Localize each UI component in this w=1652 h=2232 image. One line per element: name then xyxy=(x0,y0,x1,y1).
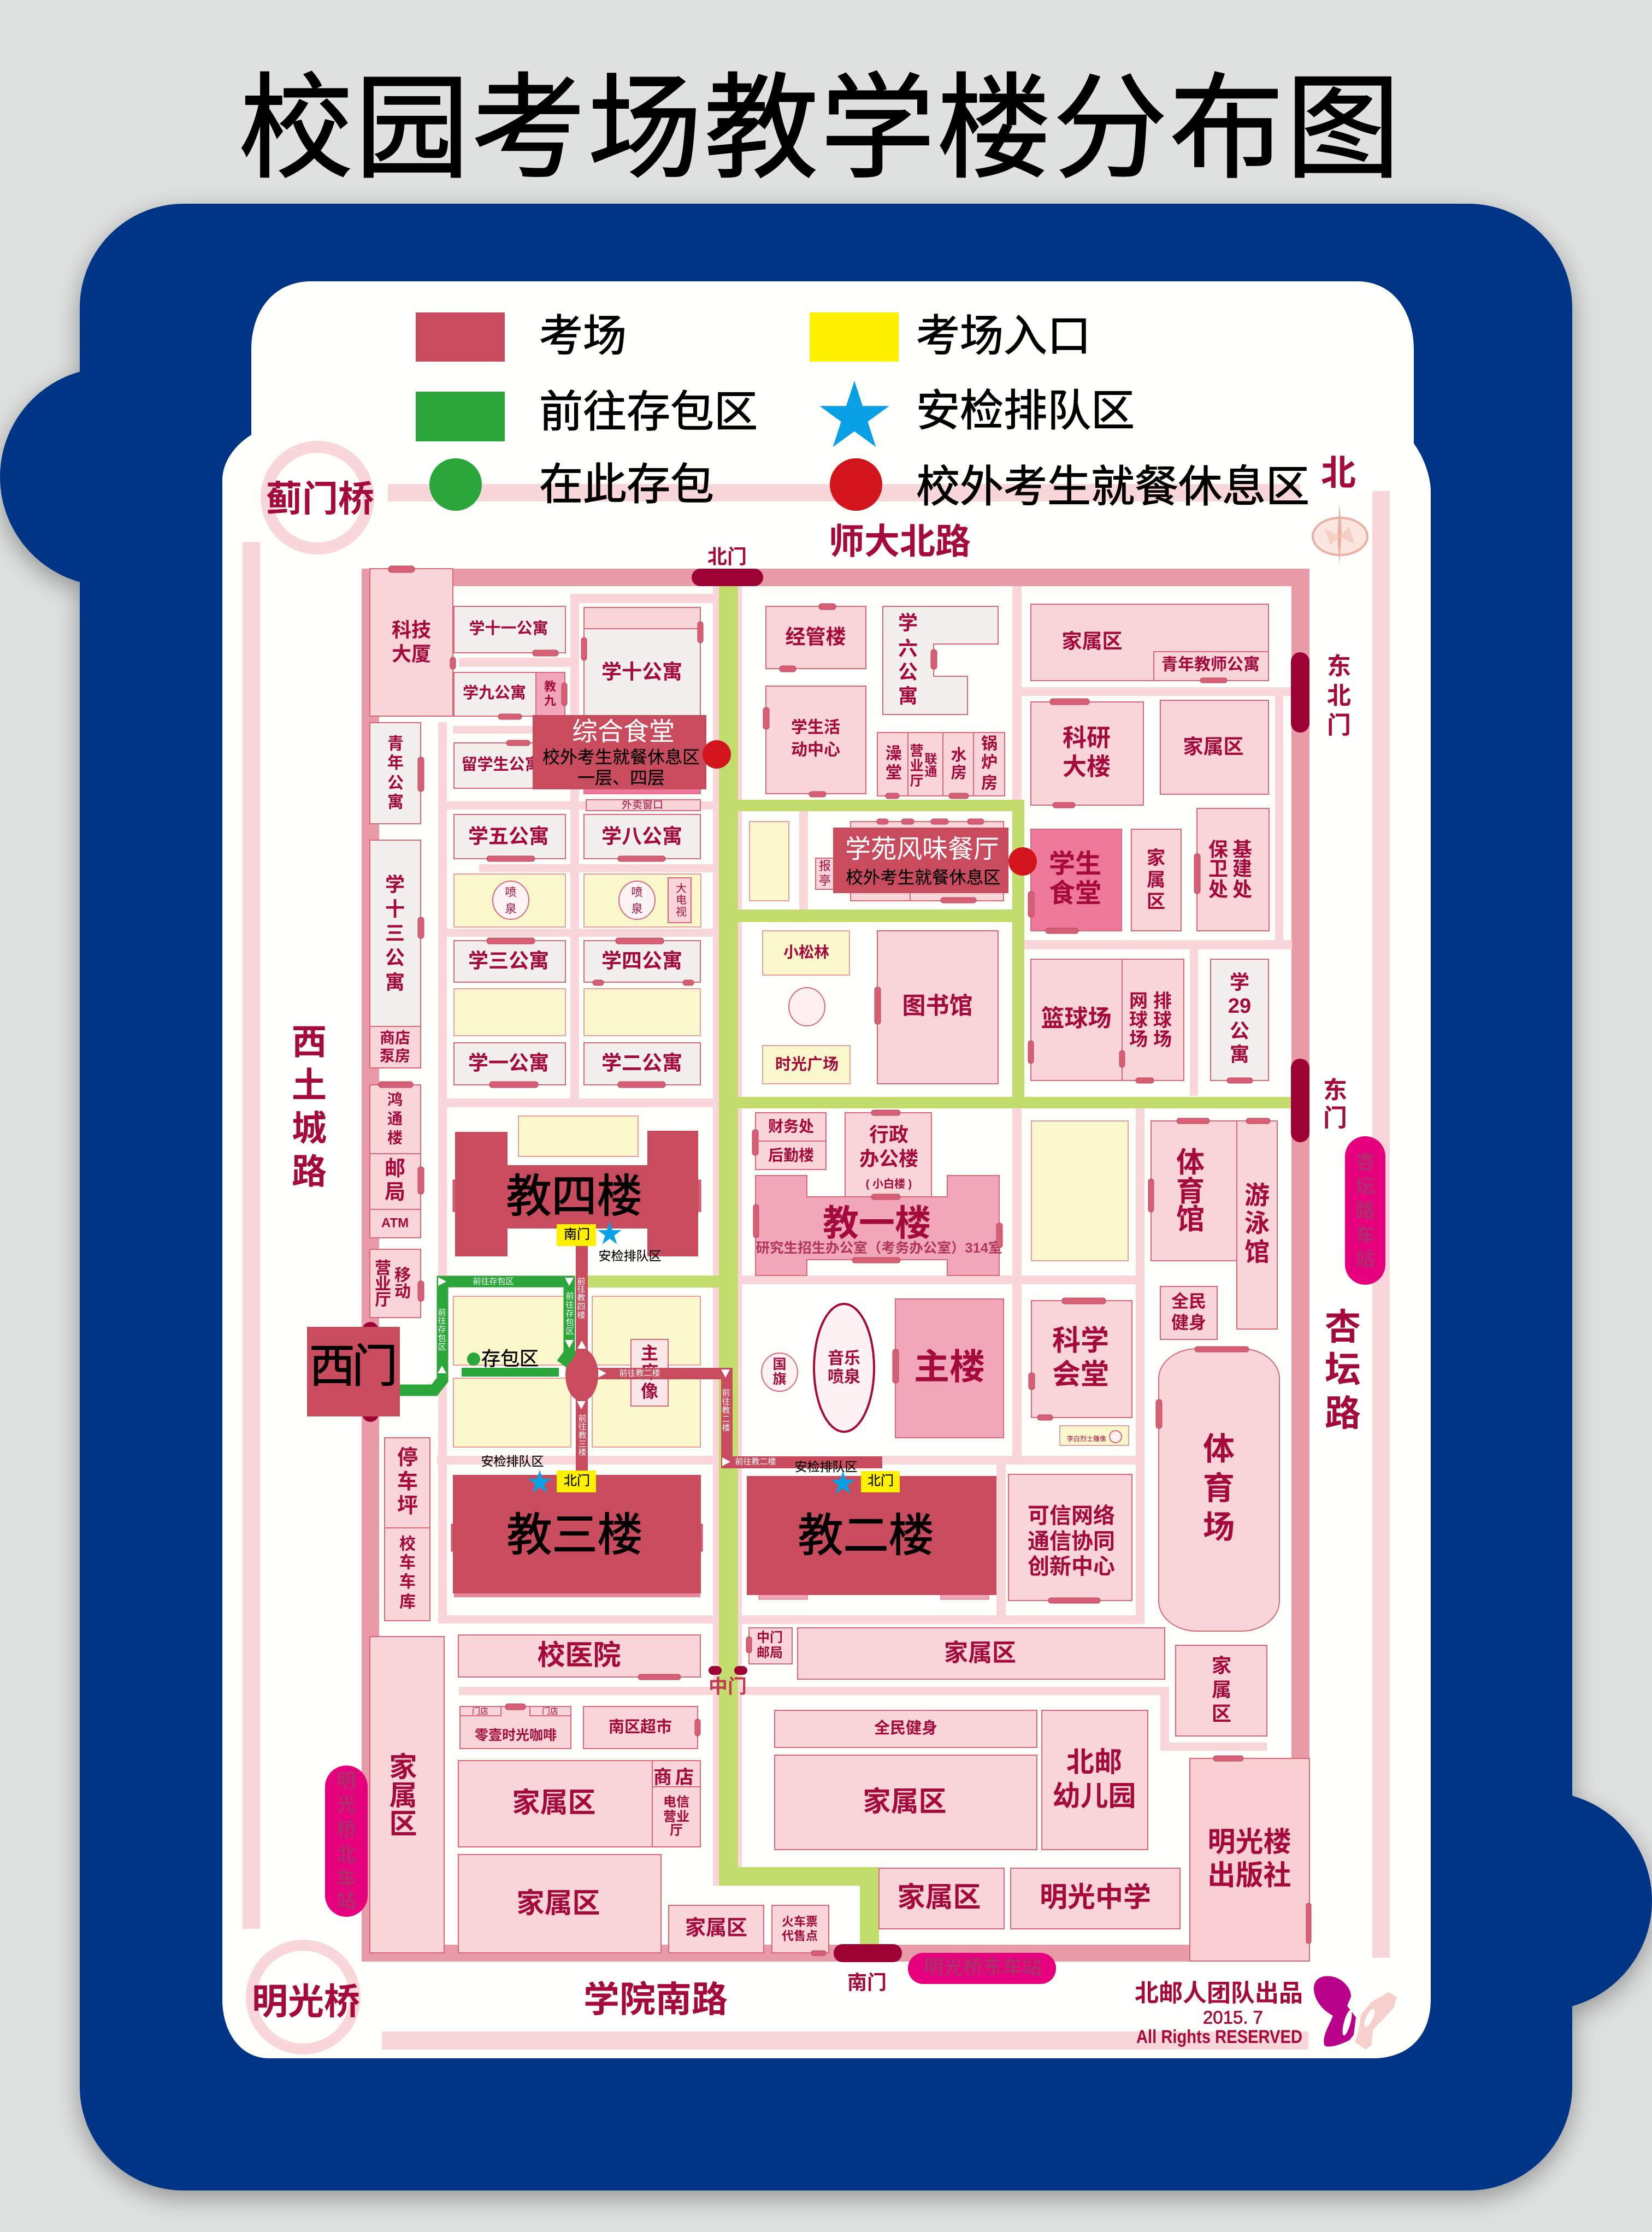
building: housing southeast vertical: 家属区 xyxy=(1212,1654,1231,1725)
compass xyxy=(1313,503,1367,564)
exam hall: teaching building 3: 教三楼 xyxy=(507,1510,642,1560)
lawn north of east sports xyxy=(1031,1121,1128,1261)
building: dorm 8 xyxy=(584,814,700,859)
gate: south xyxy=(834,1944,902,1962)
gate label: northeast: 东北门 xyxy=(1327,653,1351,739)
building: admin office: 办公楼 xyxy=(859,1147,918,1170)
building: kindergarten: 北邮 xyxy=(1066,1747,1122,1778)
entrance: south door of building 4 xyxy=(557,1224,596,1246)
building: dorm 9 xyxy=(454,672,536,716)
building: dorm 9: 学九公寓 xyxy=(463,684,526,702)
building: gymnasium: 体育馆 xyxy=(1176,1147,1205,1236)
building: zhongmen post office: 中门 xyxy=(757,1630,783,1645)
building: dorm 2 xyxy=(584,1043,700,1085)
credits: 北邮人团队出品 xyxy=(1135,1980,1303,2007)
gate: middle xyxy=(709,1666,747,1675)
building: kindergarten: 幼儿园 xyxy=(1052,1781,1136,1811)
building: teaching building 1: 教一楼 xyxy=(823,1203,931,1243)
building: dorm 13 xyxy=(370,840,421,1026)
entrance: north door of building 2 xyxy=(861,1471,900,1492)
building: finance office xyxy=(756,1113,826,1141)
road labels and gates xyxy=(252,453,1361,2022)
gate: north xyxy=(692,569,763,586)
gate label: north: 北门 xyxy=(707,545,747,568)
building: dorm 1 xyxy=(454,1043,565,1085)
building: dorm 10 xyxy=(584,607,700,794)
building: train ticket office xyxy=(772,1905,829,1953)
lawn: small pine wood: 小松林 xyxy=(783,944,829,960)
canteen callout: Xueyuan restaurant xyxy=(833,828,1008,893)
campus inner lanes xyxy=(437,586,1292,1886)
building: public fitness: 全民 xyxy=(1171,1291,1206,1311)
legend swatch: entrance xyxy=(810,312,899,362)
flag pole xyxy=(762,1353,798,1391)
building: teaching building 1: 研究生招生办公室（考务办公室）314室 xyxy=(756,1240,1002,1256)
building: innovation centre xyxy=(1008,1474,1132,1601)
building: housing with shops xyxy=(458,1761,700,1847)
building: hospital: 校医院 xyxy=(537,1640,621,1670)
route labels: 前往存包区 xyxy=(438,1308,446,1351)
route labels: 前往教四楼 xyxy=(577,1277,586,1320)
north marker: 北 xyxy=(1321,453,1356,493)
legend label: security queue: 安检排队区 xyxy=(916,387,1135,435)
building row: bath, telecom, water, boiler xyxy=(877,733,1005,796)
building: student canteen: 食堂 xyxy=(1049,879,1101,908)
star: queue at building 3 xyxy=(528,1470,552,1493)
building: housing vertical xyxy=(1131,829,1181,931)
building: economics and management: 经管楼 xyxy=(786,626,846,648)
canteen callout: comprehensive dining hall: 综合食堂 xyxy=(572,717,675,746)
legend label: rest area: 校外考生就餐休息区 xyxy=(916,462,1309,511)
building: zhongmen post office xyxy=(749,1628,792,1664)
building: housing south centre: 家属区 xyxy=(863,1786,947,1817)
legend label: exam hall: 考场 xyxy=(539,311,627,361)
entrance: north door of building 3: 北门 xyxy=(564,1474,590,1488)
building: mobile hall xyxy=(370,1249,421,1318)
building: dorm 3: 学三公寓 xyxy=(468,949,549,972)
building: science tower xyxy=(370,569,453,716)
building: housing wide xyxy=(798,1628,1165,1679)
label: queue at building 4: 安检排队区 xyxy=(599,1249,661,1263)
building: logistics: 后勤楼 xyxy=(768,1147,814,1164)
butterfly logo xyxy=(1314,1976,1397,2050)
building: teaching 9 xyxy=(536,672,565,716)
building entrances xyxy=(379,566,1311,1956)
building: coffee shop: 门店 xyxy=(542,1707,558,1716)
building: logistics xyxy=(756,1141,826,1170)
building: housing with shops: 家属区 xyxy=(512,1787,596,1818)
lawn with fountain west xyxy=(454,874,565,927)
building: library xyxy=(877,931,998,1084)
building: bus garage: 校车车库 xyxy=(399,1535,416,1611)
road label: east: 杏坛路 xyxy=(1325,1307,1361,1433)
building: ATM xyxy=(370,1209,421,1238)
music fountain xyxy=(814,1304,874,1432)
building: faculty housing: 青年教师公寓 xyxy=(1161,656,1260,674)
legend label: bag storage here: 在此存包 xyxy=(539,460,714,509)
west gate block xyxy=(307,1327,400,1416)
route labels: 前往教二楼 xyxy=(619,1369,660,1378)
building: ATM: ATM xyxy=(381,1216,409,1230)
building: science hall: 科学 xyxy=(1052,1325,1109,1357)
music fountain: 喷泉 xyxy=(828,1368,860,1386)
building: coffee shop: 门店 xyxy=(472,1707,488,1716)
lawns around the statue xyxy=(453,1116,700,1447)
building: housing with shops: 厅 xyxy=(670,1823,683,1838)
building row: bath, telecom, water, boiler: 澡堂 xyxy=(886,745,902,782)
route direction arrows xyxy=(438,1277,730,1466)
building: newsstand: 报亭 xyxy=(819,859,831,887)
label: takeaway window xyxy=(586,799,700,811)
building: gymnasium xyxy=(1151,1121,1237,1261)
building: coffee shop xyxy=(460,1707,571,1749)
building: mobile hall: 营业厅 xyxy=(375,1260,391,1309)
bridge ring: Mingguang xyxy=(251,1945,355,2049)
building: youth apartment: 青年公寓 xyxy=(387,735,404,812)
credits: All Rights RESERVED xyxy=(1136,2027,1302,2047)
building: housing small xyxy=(669,1905,764,1953)
building: dorm 29: 公 xyxy=(1230,1019,1249,1042)
lawn with fountain west: 喷泉 xyxy=(505,886,517,916)
lawn with fountain east xyxy=(584,874,701,927)
legend icon: bag storage dot xyxy=(429,458,482,511)
statue plaque xyxy=(1060,1426,1129,1445)
exam hall: teaching building 2: 教二楼 xyxy=(798,1510,934,1561)
canteen callout: comprehensive dining hall: 校外考生就餐休息区 xyxy=(542,747,700,767)
label: queue at building 3: 安检排队区 xyxy=(481,1454,544,1468)
building: hospital xyxy=(458,1635,700,1677)
bus stop: Mingguang east xyxy=(908,1953,1056,1984)
lawn with fountain east: 大电视 xyxy=(676,882,687,918)
building: train ticket office: 代售点 xyxy=(782,1929,818,1942)
building: post office xyxy=(370,1154,421,1209)
building: mobile hall: 移动 xyxy=(394,1266,411,1301)
building: international dorm: 留学生公寓 xyxy=(461,755,541,773)
route labels xyxy=(438,1277,776,1466)
building: science hall xyxy=(1031,1301,1132,1418)
building: public fitness south: 全民健身 xyxy=(874,1719,937,1737)
building: Mingguang press: 出版社 xyxy=(1207,1859,1291,1891)
road label: north: 师大北路 xyxy=(829,521,971,562)
bridge label: Jimen: 蓟门桥 xyxy=(266,479,374,519)
building: housing southwest: 家属区 xyxy=(516,1888,600,1918)
building: tennis and volleyball courts: 网球场 xyxy=(1129,991,1148,1050)
bridge label: Mingguang: 明光桥 xyxy=(252,1981,360,2022)
flag pole: 国旗 xyxy=(772,1357,787,1387)
building: swimming pool: 游泳馆 xyxy=(1244,1181,1270,1266)
building: parking lot xyxy=(385,1438,430,1528)
building: student canteen xyxy=(1031,829,1122,931)
route labels: 前往教二楼 xyxy=(722,1389,730,1432)
green walkway routes xyxy=(587,586,1297,1946)
music fountain: 音乐 xyxy=(828,1349,860,1368)
building: science hall: 会堂 xyxy=(1052,1359,1109,1391)
building: security and construction offices: 基建处 xyxy=(1232,838,1252,900)
building: housing vertical: 家属区 xyxy=(1147,848,1165,912)
title: 校园考场教学楼分布图 xyxy=(239,66,1402,192)
bus stop: Mingguang north: 明光桥北车站 xyxy=(337,1770,356,1912)
building: research tower: 科研 xyxy=(1063,724,1111,752)
building: dorm 11 xyxy=(454,606,565,653)
building: dorm 1: 学一公寓 xyxy=(468,1052,549,1074)
building: housing west tall: 家属区 xyxy=(389,1751,417,1840)
gate label: east: 东门 xyxy=(1323,1077,1347,1132)
entrance: south door of building 4: 南门 xyxy=(564,1227,590,1242)
building: zhongmen post office: 邮局 xyxy=(757,1645,783,1661)
building: housing with shops: 电信 xyxy=(663,1795,689,1809)
building row: bath, telecom, water, boiler: 营业厅 xyxy=(910,743,924,789)
road label: west: 西土城路 xyxy=(292,1023,327,1191)
bus stop: Xingtan: 杏坛路车站 xyxy=(1355,1150,1375,1271)
building: admin office: ( 小白楼 ) xyxy=(866,1178,912,1190)
building: public fitness: 健身 xyxy=(1171,1313,1206,1332)
credits: 2015. 7 xyxy=(1203,2007,1263,2028)
building: international dorm xyxy=(454,743,565,788)
building: housing southeast vertical xyxy=(1176,1645,1267,1736)
building: innovation centre: 可信网络 xyxy=(1028,1504,1115,1528)
lawn: time square xyxy=(763,1046,850,1084)
white map panel xyxy=(222,281,1431,2058)
route labels: 前往教二楼 xyxy=(735,1457,776,1466)
entrance: north door of building 2: 北门 xyxy=(868,1474,894,1488)
building: student canteen: 学生 xyxy=(1049,850,1101,878)
round plaza xyxy=(789,988,825,1026)
lawn near Xueyuan xyxy=(750,822,789,901)
building: Hongtong xyxy=(370,1085,421,1154)
building: main building: 主楼 xyxy=(914,1347,985,1386)
building: dorm 8: 学八公寓 xyxy=(601,825,682,848)
lawn with fountain east: 喷泉 xyxy=(632,886,642,916)
building: dorm 5: 学五公寓 xyxy=(468,825,549,848)
building row: bath, telecom, water, boiler: 水房 xyxy=(951,746,967,782)
building: Mingguang press: 明光楼 xyxy=(1207,1827,1291,1857)
exam hall: teaching building 4 xyxy=(453,1131,701,1256)
exam hall: teaching building 4: 教四楼 xyxy=(506,1171,642,1221)
building: science tower: 科技 xyxy=(392,618,431,641)
building: housing with shops: 商店 xyxy=(653,1767,697,1788)
entrance: north door of building 3 xyxy=(557,1471,596,1492)
rest area dot: dining hall xyxy=(703,740,731,769)
building: stadium: 体育场 xyxy=(1203,1431,1235,1545)
route labels: 前往教三楼 xyxy=(578,1414,587,1457)
building: security and construction offices xyxy=(1197,808,1269,931)
building: Mingguang press xyxy=(1190,1758,1309,1961)
lawns between dorms xyxy=(454,989,700,1036)
rest area dot: Xueyuan restaurant xyxy=(1008,847,1037,876)
route: to exam buildings xyxy=(565,1246,882,1472)
building row: bath, telecom, water, boiler: 锅炉房 xyxy=(981,735,998,792)
building: newsstand xyxy=(816,858,837,889)
building: housing: 家属区 xyxy=(1183,735,1243,758)
building: dorm 4 xyxy=(584,941,700,982)
building: public fitness south xyxy=(775,1710,1037,1747)
statue plaque: 李白烈士雕像 xyxy=(1067,1434,1106,1443)
campus perimeter road xyxy=(362,569,1309,1962)
building: Mingguang middle school: 明光中学 xyxy=(1040,1881,1151,1913)
building: tennis and volleyball courts: 排球场 xyxy=(1153,991,1172,1050)
building: shops and pump room xyxy=(370,1026,421,1068)
statue of chairman: 主席像 xyxy=(641,1343,658,1401)
building: dorm 6 xyxy=(883,606,998,715)
building: dorm 3 xyxy=(454,941,565,982)
building: housing west tall xyxy=(370,1637,444,1953)
building: Mingguang middle school xyxy=(1011,1868,1180,1929)
building: housing southwest xyxy=(458,1855,661,1953)
building: faculty housing: 家属区 xyxy=(1062,630,1122,652)
building: dorm 13: 学十三公寓 xyxy=(385,873,405,993)
building: public fitness xyxy=(1160,1286,1217,1339)
route labels: 前往存包区 xyxy=(565,1291,574,1336)
building: Hongtong: 鸿通楼 xyxy=(387,1091,403,1146)
canteen callout: Xueyuan restaurant: 校外考生就餐休息区 xyxy=(846,867,1001,887)
building: dorm 29: 学 xyxy=(1230,971,1249,993)
gate: east xyxy=(1291,1059,1309,1142)
building: post office: 邮局 xyxy=(385,1158,405,1204)
building: shops and pump room: 商店 xyxy=(380,1029,410,1047)
building: dorm 6: 学六公寓 xyxy=(898,612,918,707)
gate: west pills xyxy=(362,1322,379,1422)
building: dorm 4: 学四公寓 xyxy=(601,949,682,972)
building: supermarket: 南区超市 xyxy=(609,1718,672,1736)
bus stop: Mingguang east: 明光桥东车站 xyxy=(924,1956,1042,1979)
bus stop: Xingtan xyxy=(1345,1136,1385,1285)
building: student activity centre: 动中心 xyxy=(791,741,840,759)
middle gate label: 中门 xyxy=(709,1676,747,1698)
building: housing by south gate xyxy=(879,1868,1004,1929)
building: housing with shops: 营业 xyxy=(663,1809,689,1824)
building: kindergarten xyxy=(1042,1710,1148,1850)
canteen callout: comprehensive dining hall: 一层、四层 xyxy=(577,768,665,788)
building: basketball court: 篮球场 xyxy=(1041,1006,1111,1032)
building: faculty housing xyxy=(1031,604,1268,681)
building: teaching building 1 xyxy=(756,1176,1002,1276)
building: economics and management xyxy=(766,606,866,669)
building: housing by south gate: 家属区 xyxy=(897,1881,981,1913)
building: innovation centre: 通信协同 xyxy=(1028,1530,1115,1554)
exam hall: teaching building 3 xyxy=(451,1475,703,1597)
credits xyxy=(1135,1980,1303,2047)
building: supermarket xyxy=(583,1707,698,1749)
building: dorm 2: 学二公寓 xyxy=(601,1052,682,1074)
building: dorm 29: 29 xyxy=(1228,995,1251,1018)
building: research tower xyxy=(1031,702,1143,805)
route: to bag storage xyxy=(400,1282,569,1390)
outer city roads xyxy=(243,484,1390,2050)
bus stop: Mingguang north xyxy=(325,1765,368,1917)
building: coffee shop: 零壹时光咖啡 xyxy=(475,1728,557,1743)
building: Xueyuan base xyxy=(851,822,1004,901)
canteen callout: Xueyuan restaurant: 学苑风味餐厅 xyxy=(845,835,999,863)
canteen callout: comprehensive dining hall xyxy=(533,715,706,789)
building: dorm 11: 学十一公寓 xyxy=(469,619,548,637)
lawn: time square: 时光广场 xyxy=(775,1055,839,1073)
building: research tower: 大楼 xyxy=(1063,754,1111,780)
exam hall: teaching building 2 xyxy=(747,1476,996,1599)
star: queue at building 2 xyxy=(831,1471,855,1494)
building: student activity centre xyxy=(766,686,866,794)
building: dorm 5 xyxy=(454,814,565,859)
lawn: small pine wood xyxy=(763,931,849,975)
legend swatch: exam hall xyxy=(416,312,505,362)
building: tennis and volleyball courts xyxy=(1122,959,1184,1080)
route labels: 前往存包区 xyxy=(473,1277,514,1286)
legend icon: security queue star xyxy=(819,381,889,447)
legend xyxy=(416,311,1309,511)
legend label: to bag storage: 前往存包区 xyxy=(539,388,758,436)
bridge ring: Jimen xyxy=(267,447,368,548)
building: finance office: 财务处 xyxy=(768,1118,814,1135)
building: innovation centre: 创新中心 xyxy=(1028,1555,1115,1579)
label: takeaway window: 外卖窗口 xyxy=(622,799,663,811)
building: student activity centre: 学生活 xyxy=(791,719,840,736)
legend icon: rest area dot xyxy=(830,458,882,511)
building: housing xyxy=(1160,700,1268,794)
building: science tower: 大厦 xyxy=(392,642,431,665)
building: housing small: 家属区 xyxy=(685,1917,747,1940)
building: stadium xyxy=(1159,1349,1279,1631)
building: youth apartment xyxy=(370,723,421,824)
building: admin office: 行政 xyxy=(869,1123,908,1146)
building: swimming pool xyxy=(1237,1121,1277,1329)
building: housing wide: 家属区 xyxy=(944,1640,1016,1666)
building: train ticket office: 火车票 xyxy=(782,1915,818,1928)
building: shops and pump room: 泵房 xyxy=(380,1048,410,1064)
building: dorm 29: 寓 xyxy=(1230,1043,1249,1065)
building: main building xyxy=(895,1299,1004,1438)
star: queue at building 4 xyxy=(598,1221,622,1244)
building: admin office xyxy=(845,1113,931,1197)
building: housing south centre xyxy=(775,1755,1037,1850)
gate label: south: 南门 xyxy=(847,1971,887,1994)
label: queue at building 2: 安检排队区 xyxy=(794,1460,858,1474)
legend swatch: to bag storage xyxy=(416,392,505,441)
building: library: 图书馆 xyxy=(902,993,972,1019)
building: teaching 9: 教九 xyxy=(544,680,556,708)
building: parking lot: 停车坪 xyxy=(397,1446,418,1517)
building: dorm 29 xyxy=(1211,959,1268,1080)
gate: northeast xyxy=(1291,652,1309,733)
building row: bath, telecom, water, boiler: 联通 xyxy=(924,752,937,778)
building: bus garage xyxy=(385,1528,430,1621)
bag storage marker: 存包区 xyxy=(481,1348,539,1370)
west gate block: 西门 xyxy=(309,1341,394,1392)
building: dorm 10: 学十公寓 xyxy=(601,661,682,683)
statue of chairman xyxy=(631,1339,668,1406)
building: security and construction offices: 保卫处 xyxy=(1208,838,1228,900)
road label: south: 学院南路 xyxy=(583,1979,728,2020)
legend label: entrance: 考场入口 xyxy=(916,311,1091,361)
building: basketball court xyxy=(1031,959,1122,1080)
